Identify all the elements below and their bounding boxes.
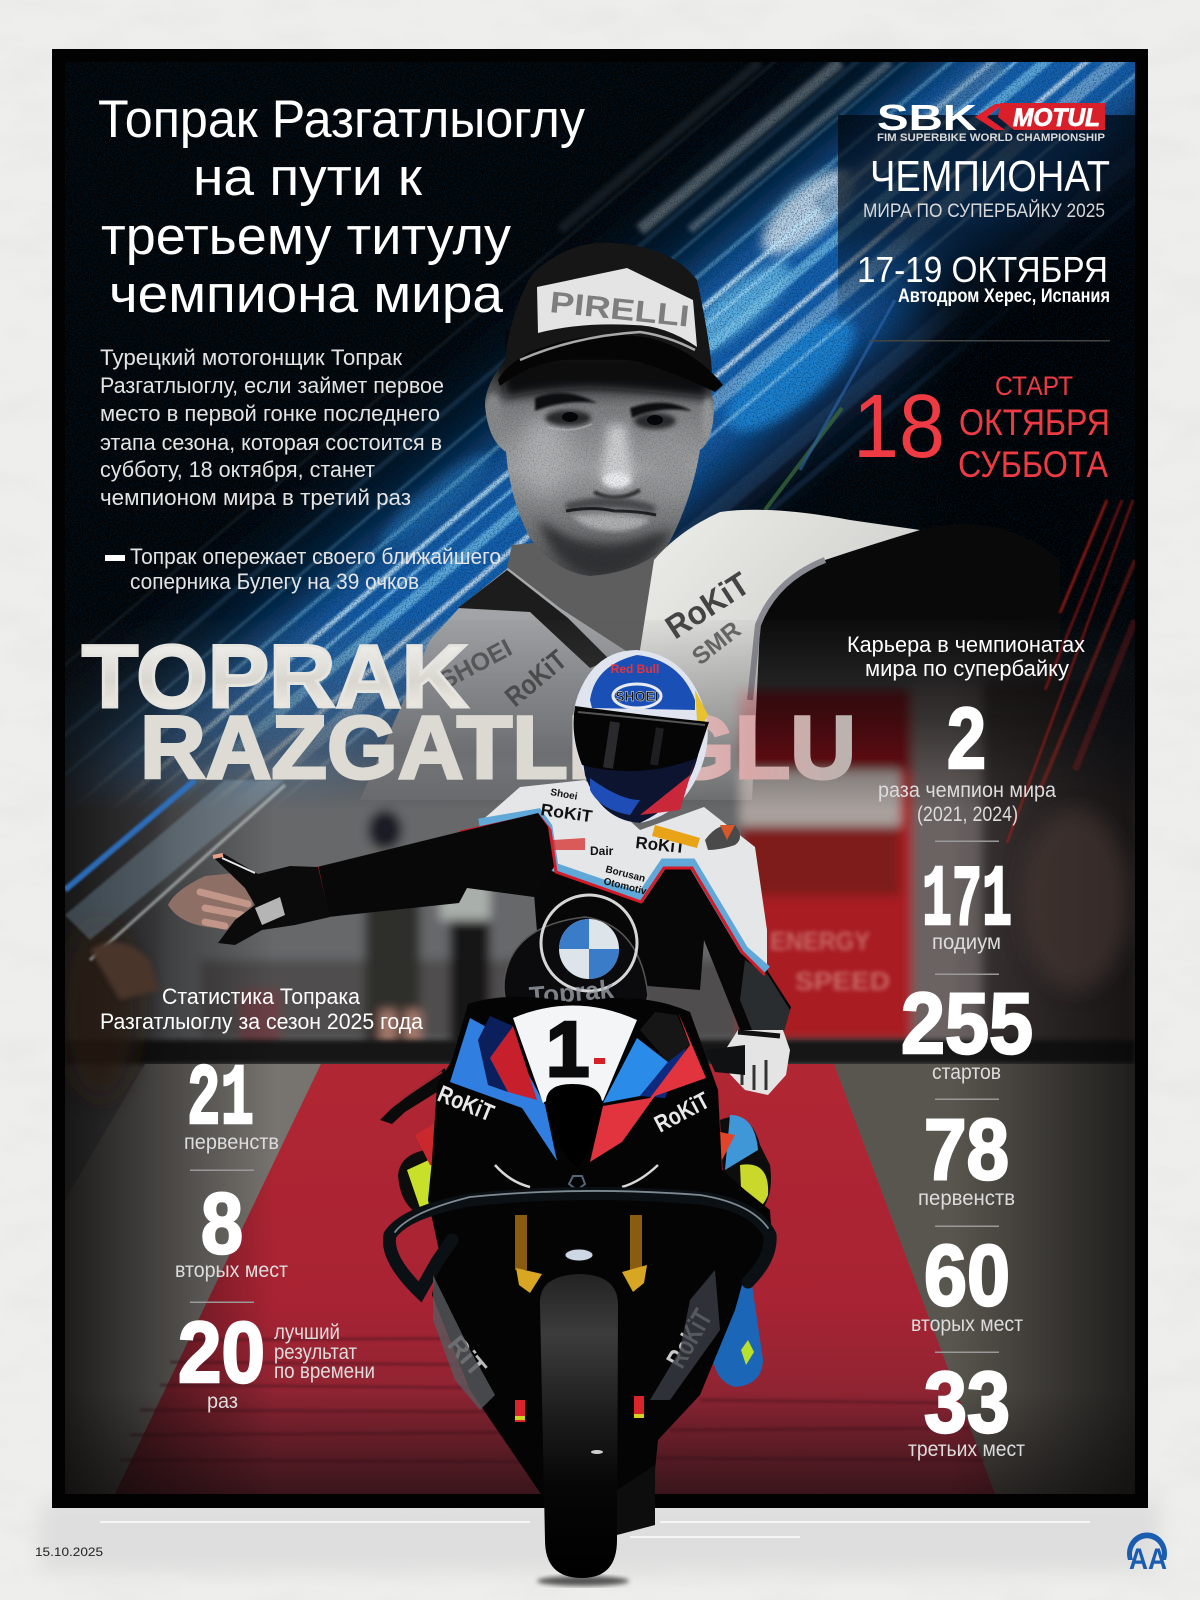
stat: 60 second places: вторых мест [911, 1313, 1023, 1336]
stat: 20 best times: по времени [274, 1360, 375, 1383]
under-brim shadow [505, 330, 628, 360]
stat: 171 podiums: 171 [922, 852, 1012, 950]
right hand glove [722, 1030, 790, 1095]
stat: 255 starts: стартов [932, 1061, 1001, 1084]
event info: Автодром Херес, Испания [898, 286, 1110, 307]
white chest and shoulder [479, 780, 767, 970]
stat: 78 wins: 78 [924, 1102, 1009, 1198]
fairing sponsors: RoKiT [660, 1304, 718, 1373]
chest patches: Borusan [604, 864, 646, 885]
air intake [546, 1084, 602, 1168]
helmet logos: Red Bull [611, 662, 659, 676]
right lever [705, 1045, 745, 1075]
red streaks [1007, 500, 1135, 843]
fairing colours [450, 1018, 557, 1161]
tyre shadow [537, 1576, 629, 1586]
career stats [847, 632, 1085, 1461]
fairing sponsors: RiT [441, 1330, 493, 1383]
race start date: СУББОТА [958, 444, 1108, 485]
neck [506, 542, 667, 651]
windshield and bmw roundel [504, 917, 648, 1030]
intro text block: Турецкий мотогонщик Топрак [100, 345, 402, 370]
forks and fender [515, 1215, 527, 1270]
event info [857, 152, 1110, 307]
suit lettering [441, 571, 746, 707]
suit left and collar [360, 568, 626, 800]
title: чемпиона мира [109, 265, 504, 324]
suit lettering: SHOEI [435, 634, 517, 695]
logo: SBK Motul: FIM SUPERBIKE WORLD CHAMPIONSHIP [877, 132, 1105, 144]
fairing sponsors [434, 1081, 718, 1383]
title: Топрак Разгатлыоглу [98, 90, 585, 149]
stat: 8 second places [175, 1176, 288, 1303]
logo: Anadolu Agency: AA [1129, 1543, 1167, 1576]
chest patches: Dair [590, 844, 614, 858]
helmet [573, 650, 708, 823]
cap [498, 243, 723, 392]
race start date [853, 371, 1110, 485]
stat: 2 titles: 2 [947, 691, 986, 787]
career heading [847, 632, 1085, 681]
stat: 60 second places: 60 [924, 1228, 1010, 1324]
logo: Anadolu Agency [1127, 1532, 1167, 1576]
suit lettering: RoKiT [499, 644, 572, 713]
logo: SBK Motul: SBK [877, 97, 977, 138]
number plate [513, 1005, 637, 1103]
rider right arm and body [505, 863, 791, 1032]
motorcycle body silhouette [428, 997, 772, 1530]
helmet logos [611, 662, 659, 704]
fairing sponsors: RoKiT [434, 1081, 498, 1127]
rider and motorcycle: Toprak [528, 974, 615, 1011]
chest patches: RoKiT [539, 800, 594, 826]
headlights [495, 1165, 658, 1187]
stat: 8 second places: 8 [201, 1176, 243, 1272]
lower streak overlay [65, 780, 285, 960]
career heading: Карьера в чемпионатах [847, 632, 1085, 657]
intro text block: субботу, 18 октября, станет [100, 457, 375, 482]
footer date: 15.10.2025 [35, 1545, 103, 1559]
blue thin streak [800, 300, 895, 470]
season heading: Разгатлыоглу за сезон 2025 года [100, 1009, 424, 1034]
stat: 171 podiums: подиум [932, 931, 1001, 954]
big name text [82, 626, 856, 797]
chest patches: Shoei [549, 787, 578, 803]
cap logo: PIRELLI [548, 286, 691, 334]
suit lettering: SMR [687, 616, 746, 671]
stat: 255 starts: 255 [901, 976, 1033, 1072]
stat: 2 titles: (2021, 2024) [917, 803, 1018, 826]
stat: 78 wins [918, 1102, 1015, 1227]
stat: 20 best times: 20 [178, 1305, 265, 1401]
title: третьему титулу [101, 207, 511, 266]
fans' hands [90, 870, 255, 1000]
logo: SBK Motul: MOTUL [1013, 104, 1100, 132]
season heading: Статистика Топрака [162, 984, 361, 1009]
event info: ЧЕМПИОНАТ [870, 152, 1110, 201]
sleeve marbling [740, 960, 790, 1032]
blurred race scene [60, 620, 1135, 1500]
title: на пути к [193, 148, 423, 207]
event info: 17-19 ОКТЯБРЯ [857, 249, 1108, 290]
winglet bar [389, 1191, 770, 1292]
banner lettering [770, 926, 890, 996]
rider and motorcycle [213, 650, 791, 1586]
left arm [317, 813, 554, 917]
event info: МИРА ПО СУПЕРБАЙКУ 2025 [863, 200, 1105, 222]
stat: 33 third places: 33 [924, 1355, 1010, 1451]
big name text: TOPRAK [82, 626, 468, 726]
dark sleeve behind [756, 524, 1060, 764]
season stats [100, 984, 424, 1413]
helmet visor [574, 706, 709, 771]
banner lettering: ENERGY [770, 926, 870, 956]
stat: 78 wins: первенств [918, 1187, 1015, 1210]
blue light streaks [65, 62, 1135, 804]
vignette and crowd [65, 620, 275, 1494]
dark box behind championship header [838, 115, 1135, 330]
intro text block: место в первой гонке последнего [100, 401, 440, 426]
stat: 20 best times [178, 1305, 375, 1413]
race start date: СТАРТ [995, 371, 1073, 401]
chest patches: RoKiT [635, 833, 687, 857]
suit lettering: RoKiT [659, 565, 756, 646]
helmet logos: SHOEI [615, 688, 659, 704]
race start date: ОКТЯБРЯ [959, 402, 1110, 443]
red banner [732, 765, 918, 1042]
carpet ripples [120, 1338, 985, 1462]
blue trim [479, 813, 767, 970]
ground and carpet [65, 1040, 1135, 1064]
title [98, 90, 585, 324]
stat: 20 best times: раз [207, 1390, 238, 1413]
big name text: RAZGATLIOGLU [140, 697, 856, 797]
intro text block [100, 345, 444, 510]
intro text block: Разгатлыоглу, если займет первое [100, 373, 444, 398]
face shading [484, 355, 715, 580]
season heading [100, 984, 424, 1034]
bullet note: Топрак опережает своего ближайшего [130, 544, 501, 569]
face [485, 360, 714, 576]
stat: 2 titles [878, 691, 1056, 842]
chest patches: Otomotiv [602, 876, 648, 898]
intro text block: этапа сезона, которая состоится в [100, 430, 442, 455]
knees and boot [398, 1135, 460, 1215]
career heading: мира по супербайку [865, 656, 1069, 681]
stat: 60 second places [911, 1228, 1023, 1353]
left glove [214, 854, 330, 945]
stat: 20 best times: лучший [274, 1321, 340, 1344]
stat: 171 podiums [922, 852, 1012, 975]
red trim [460, 815, 765, 975]
suit right shoulder [640, 510, 920, 800]
intro text block: чемпионом мира в третий раз [100, 485, 411, 510]
logo: SBK Motul [877, 97, 1105, 144]
stat: 21 wins: первенств [184, 1131, 279, 1154]
fairing sponsors: RoKiT [650, 1087, 714, 1138]
stat: 33 third places: третьих мест [908, 1438, 1025, 1461]
stat: 20 best times: результат [274, 1341, 357, 1364]
stat: 2 titles: раза чемпион мира [878, 779, 1056, 802]
front tyre [540, 1274, 618, 1578]
bullet note [105, 544, 501, 594]
portrait: Toprak in Pirelli cap [360, 243, 1060, 800]
banner lettering: SPEED [795, 966, 890, 996]
left lever [380, 1068, 448, 1124]
bullet note: соперника Булегу на 39 очков [130, 569, 419, 594]
stat: 21 wins: 21 [187, 1051, 254, 1149]
streak speckle [65, 62, 1135, 794]
stat: 8 second places: вторых мест [175, 1259, 288, 1282]
green streak [765, 408, 842, 510]
rider and motorcycle: 1 [546, 1005, 589, 1093]
engine details [433, 1270, 720, 1422]
chest patches [539, 787, 687, 898]
race start date: 18 [853, 377, 945, 477]
